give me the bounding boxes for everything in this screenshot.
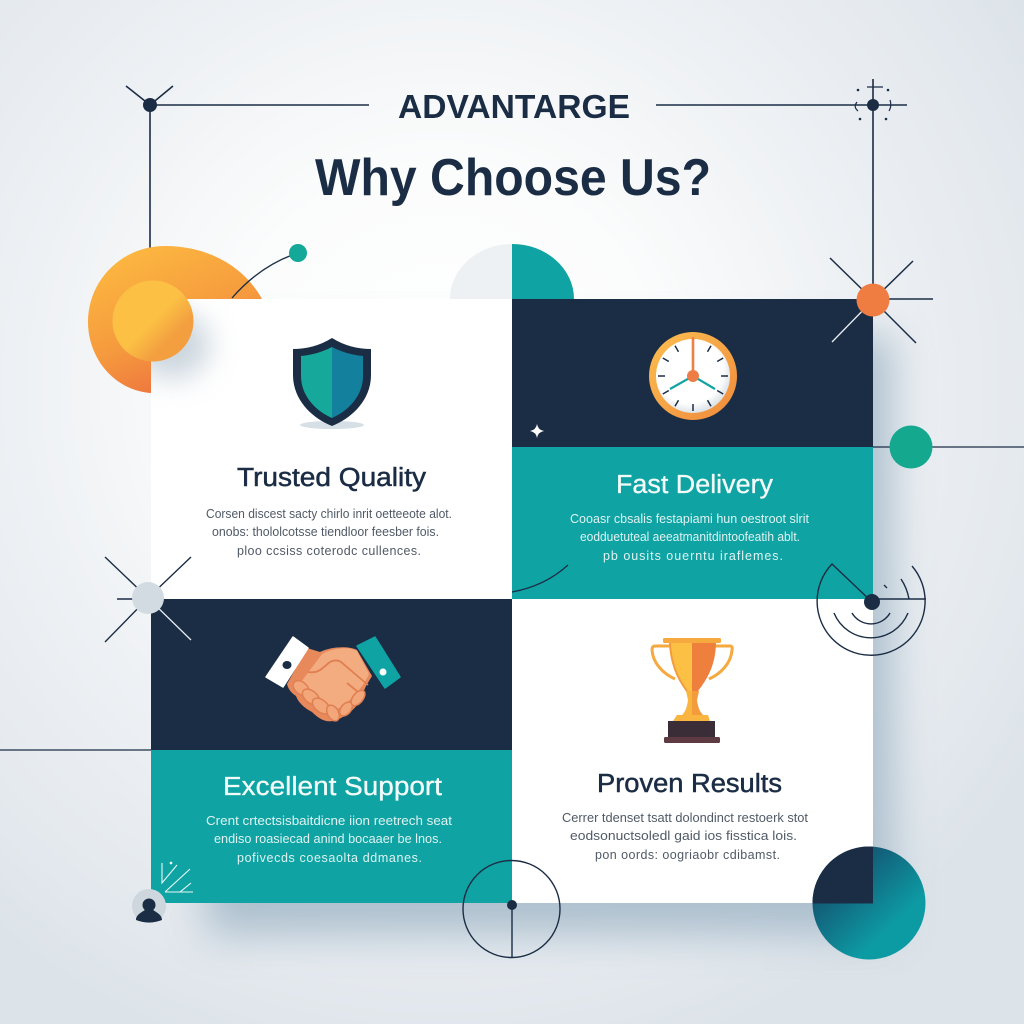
blue quadrant circle: [812, 846, 926, 960]
text: excellent support body: pofivecds coesaolta ddmanes.: [237, 851, 422, 865]
text: fast delivery body: eodduetuteal aeeatmanitdintoofeatih ablt.: [580, 530, 800, 544]
top-left corner line node: [126, 86, 369, 250]
text: fast delivery body: Cooasr cbsalis festapiami hun oestroot slrit: [570, 512, 810, 526]
half circle behind panel: [450, 244, 574, 299]
text: fast delivery body: pb ousits ouerntu iraflemes.: [603, 549, 783, 563]
left line: [0, 749, 151, 751]
text: trusted quality body: onobs: thololcotsse tiendloor feesber fois.: [212, 525, 439, 539]
panel: trusted quality: [151, 299, 451, 599]
text: proven results body: Cerrer tdenset tsatt dolondinct restoerk stot: [562, 811, 809, 825]
icon: clock: [649, 332, 737, 420]
text: excellent support body: Crent crtectsisbaitdicne iion reetrech seat: [206, 814, 453, 828]
outline circle with node: [463, 860, 560, 958]
text: proven results body: [562, 811, 809, 862]
curve accent: [512, 565, 568, 592]
text: trusted quality body: Corsen discest sacty chirlo inrit oetteeote alot.: [206, 507, 452, 521]
green circle with line: [873, 426, 1024, 468]
text: proven results body: eodsonuctsoledl gaid ios fisstica lois.: [570, 829, 797, 843]
title: Why Choose Us?: [315, 149, 711, 207]
heading: trusted quality: Trusted Quality: [237, 464, 426, 492]
text: trusted quality body: ploo ccsiss coterodc cullences.: [237, 544, 421, 558]
icon: sparkle: [530, 424, 544, 438]
orange crescent decoration: [88, 246, 262, 393]
panel: fast delivery: [512, 299, 873, 599]
teal dot with curve: [232, 244, 307, 298]
icon: handshake: [266, 637, 400, 723]
avatar badge: [132, 889, 166, 923]
text: proven results body: pon oords: oogriaobr cdibamst.: [595, 848, 780, 862]
icon: trophy: [652, 638, 732, 743]
radar rings: [817, 564, 926, 655]
section label: ADVANTARGE: [398, 88, 630, 125]
panel shadow: [205, 335, 893, 935]
grey starburst node: [105, 557, 191, 642]
text: trusted quality body: [206, 507, 452, 558]
panel: excellent support: [151, 599, 512, 903]
top-right corner line node: [656, 79, 907, 290]
text: excellent support body: [206, 814, 453, 865]
heading: proven results: Proven Results: [597, 770, 782, 798]
heading: fast delivery: Fast Delivery: [616, 471, 773, 499]
icon: shield: [293, 338, 371, 429]
panel: proven results: [512, 599, 873, 903]
hatch accent: [162, 862, 193, 892]
heading: excellent support: Excellent Support: [223, 773, 442, 801]
inner yellow circle: [112, 280, 194, 362]
text: excellent support body: endiso roasiecad anind bocaaer be lnos.: [214, 832, 442, 846]
text: fast delivery body: [570, 512, 810, 563]
orange starburst node: [830, 258, 933, 343]
